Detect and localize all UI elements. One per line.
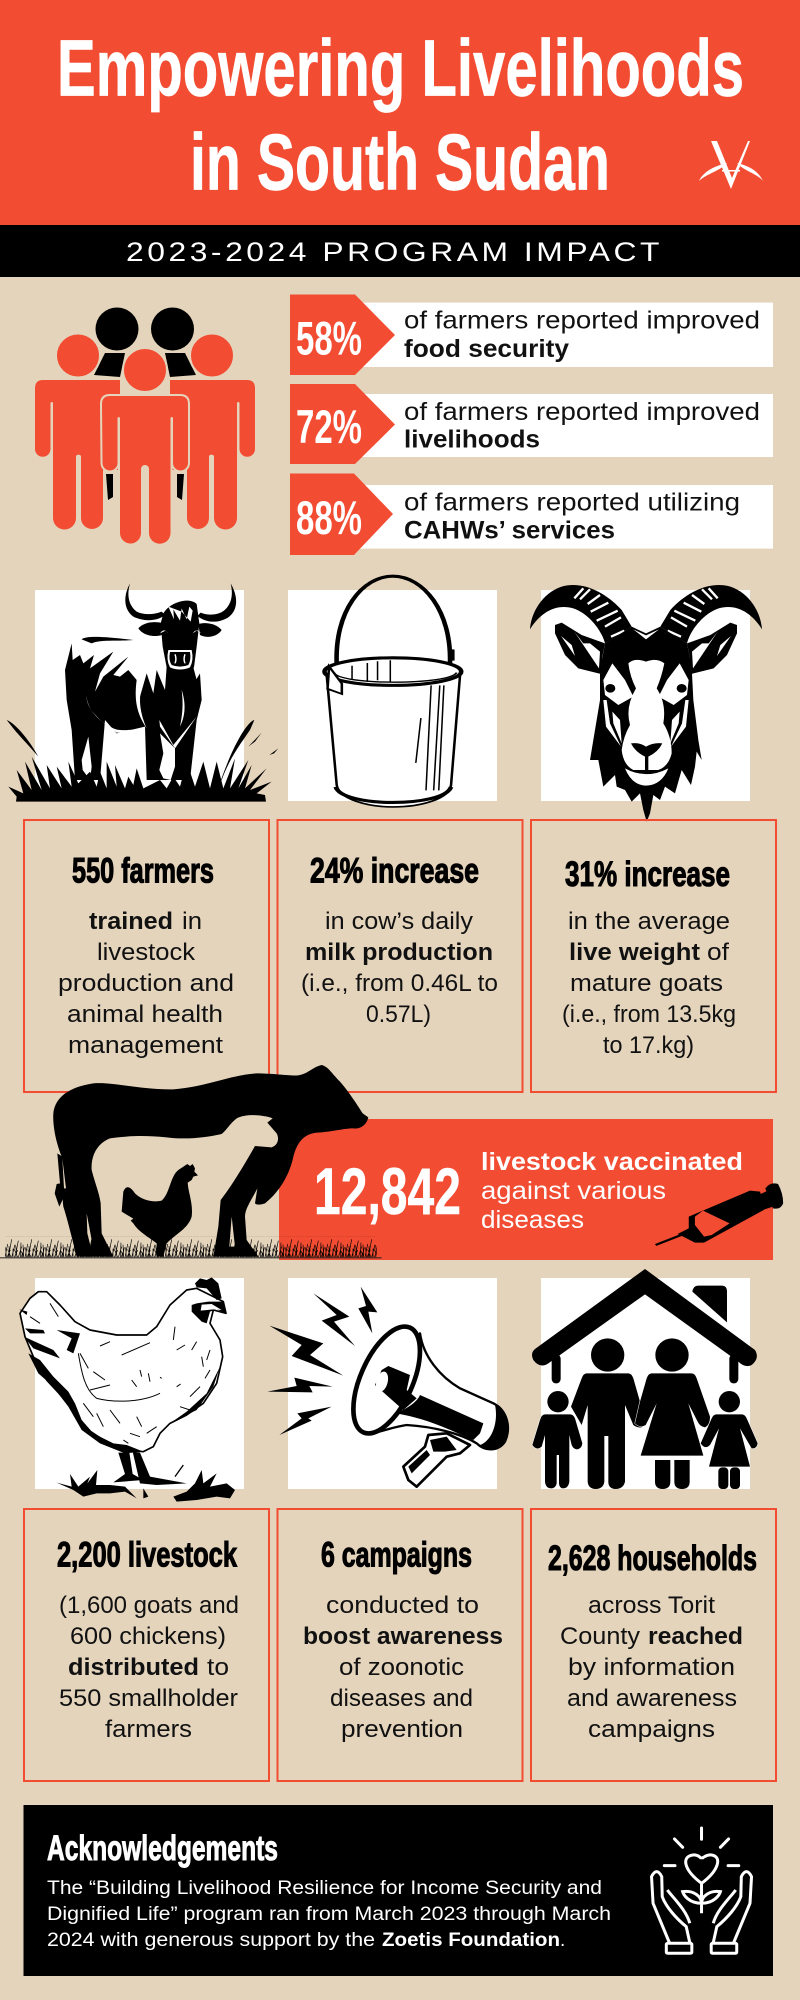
stat row: 88%: 88% xyxy=(296,491,362,544)
card: 550 farmers: livestock xyxy=(97,939,196,966)
stat row: 58%: 58% xyxy=(296,311,362,364)
grass xyxy=(5,1237,377,1257)
header banner xyxy=(0,0,800,225)
subtitle band: 2023-2024 PROGRAM IMPACT xyxy=(126,237,663,267)
card: 2,628 households: reached xyxy=(648,1623,743,1650)
card: 2,628 households: across Torit xyxy=(588,1592,715,1619)
stat row: 72%: of farmers reported improved xyxy=(404,398,760,426)
card: 2,200 livestock: farmers xyxy=(105,1716,192,1743)
card: 24% increase: (i.e., from 0.46L to xyxy=(301,970,498,997)
image panel: hen xyxy=(19,1277,244,1502)
vaccination text: livestock vaccinated xyxy=(481,1148,743,1176)
card: 6 campaigns: of zoonotic xyxy=(339,1654,464,1681)
acknowledgements heading: Acknowledgements xyxy=(47,1829,278,1868)
stat row: 58% xyxy=(290,294,773,375)
card: 2,628 households: and awareness xyxy=(567,1685,737,1712)
card: 24% increase: 24% increase xyxy=(310,852,479,891)
icon: hands holding heart plant xyxy=(652,1828,752,1953)
card: 550 farmers: trained xyxy=(89,908,173,935)
card: 31% increase: to 17.kg) xyxy=(603,1032,694,1059)
stat row: 58%: of farmers reported improved xyxy=(404,306,760,334)
card: 2,628 households: County xyxy=(560,1623,640,1650)
icon: bucket xyxy=(324,576,461,807)
card: 31% increase: 31% increase xyxy=(565,855,730,894)
title xyxy=(57,24,744,206)
subtitle band xyxy=(0,225,800,277)
card: 6 campaigns: boost awareness xyxy=(303,1623,503,1650)
card: 550 farmers: 550 farmers xyxy=(72,852,214,891)
card: 24% increase: in cow’s daily xyxy=(325,908,473,935)
acknowledgements text: Zoetis Foundation xyxy=(382,1930,560,1951)
image panel: goat xyxy=(530,585,762,822)
stat row: 58%: food security xyxy=(404,335,569,363)
image panel: household xyxy=(532,1269,758,1489)
card: 31% increase: (i.e., from 13.5kg xyxy=(562,1001,736,1028)
card: 550 farmers xyxy=(24,820,269,1092)
card: 24% increase: 0.57L) xyxy=(366,1001,431,1028)
card: 2,200 livestock: distributed xyxy=(68,1654,199,1681)
card: 2,200 livestock: (1,600 goats and xyxy=(59,1592,239,1619)
title: in South Sudan xyxy=(190,118,610,206)
card: 6 campaigns: diseases and xyxy=(330,1685,473,1712)
vaccination text: diseases xyxy=(481,1206,584,1234)
cow tail xyxy=(55,1153,66,1207)
card: 2,628 households: by information xyxy=(568,1654,735,1681)
stat row: 72%: livelihoods xyxy=(404,426,540,454)
icon: cow grass xyxy=(7,720,278,802)
big number: 12,842 xyxy=(314,1154,461,1228)
card: 31% increase: of xyxy=(707,939,729,966)
stat row: 88% xyxy=(290,474,773,555)
card: 2,628 households xyxy=(531,1509,776,1781)
card: 6 campaigns: prevention xyxy=(341,1716,463,1743)
acknowledgements text: . xyxy=(560,1930,565,1951)
icon: hen xyxy=(19,1277,235,1502)
icon: family xyxy=(532,1338,758,1489)
card: 31% increase: in the average xyxy=(568,908,730,935)
icon: cow, sheep and hen silhouette xyxy=(0,1065,382,1258)
icon: megaphone xyxy=(340,1317,508,1487)
icon: goat head xyxy=(530,585,762,822)
card: 6 campaigns: conducted to xyxy=(326,1592,479,1619)
card: 2,200 livestock: 550 smallholder xyxy=(59,1685,238,1712)
card: 550 farmers: production and xyxy=(58,970,234,997)
card: 550 farmers: in xyxy=(182,908,202,935)
acknowledgements text: The “Building Livelihood Resilience for Income Security and xyxy=(47,1878,602,1899)
hen silhouette xyxy=(122,1164,198,1257)
card: 31% increase: mature goats xyxy=(570,970,723,997)
card: 550 farmers: management xyxy=(68,1032,223,1059)
panel: livestock vaccinated xyxy=(279,1119,783,1260)
icon: syringe xyxy=(656,1183,783,1245)
card: 31% increase xyxy=(531,820,776,1092)
acknowledgements text: 2024 with generous support by the xyxy=(47,1930,375,1951)
image panel: milk bucket xyxy=(288,576,497,807)
vaccination text xyxy=(481,1148,743,1234)
card: 2,200 livestock xyxy=(24,1509,269,1781)
icon: group of people xyxy=(35,308,255,544)
image panel: cow xyxy=(7,583,278,802)
stat row: 72%: 72% xyxy=(296,400,362,453)
image panel: megaphone xyxy=(267,1278,508,1489)
card: 2,628 households: campaigns xyxy=(588,1716,715,1743)
stat row: 88%: of farmers reported utilizing xyxy=(404,488,740,516)
stat row: 88%: CAHWs’ services xyxy=(404,517,615,545)
card: 24% increase: milk production xyxy=(305,939,493,966)
card: 2,200 livestock: to xyxy=(207,1654,229,1681)
card: 2,200 livestock: 600 chickens) xyxy=(70,1623,226,1650)
stat row: 72% xyxy=(290,384,773,464)
icon: house xyxy=(532,1269,757,1383)
icon: logo xyxy=(699,141,763,189)
card: 6 campaigns xyxy=(278,1509,522,1781)
card: 550 farmers: animal health xyxy=(67,1001,223,1028)
leg gaps xyxy=(62,1158,235,1247)
acknowledgements text: Dignified Life” program ran from March 2023 through March xyxy=(47,1904,611,1925)
card: 24% increase xyxy=(278,820,522,1092)
panel: acknowledgements xyxy=(24,1805,773,1976)
card: 31% increase: live weight xyxy=(569,939,700,966)
icon: cow xyxy=(65,583,236,780)
card: 2,200 livestock: 2,200 livestock xyxy=(57,1536,237,1575)
acknowledgements text xyxy=(47,1878,611,1951)
icon: lightning bolts xyxy=(267,1287,377,1435)
card: 6 campaigns: 6 campaigns xyxy=(321,1536,472,1575)
vaccination text: against various xyxy=(481,1177,666,1205)
